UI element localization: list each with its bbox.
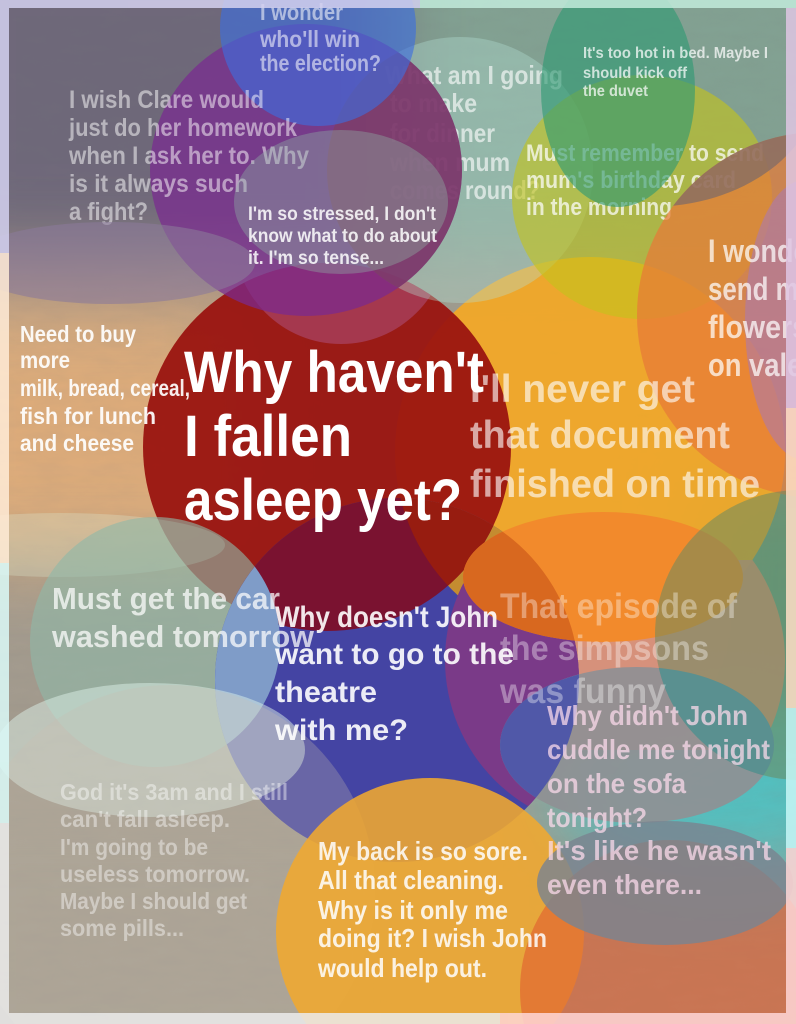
thought: sore back <box>317 836 547 983</box>
circle: pale teal upper middle <box>327 37 593 303</box>
thought: that document <box>470 368 760 506</box>
thought: car wash: washed tomorrow <box>51 619 315 654</box>
circle: purple upper left <box>150 24 462 316</box>
lens: purple overlap of blue and taupe <box>445 583 579 806</box>
lens: maroon overlap of purple and pale teal <box>327 52 462 288</box>
circle: orange red bottom right <box>520 840 796 1024</box>
thought: too hot in bed: the duvet <box>583 83 649 100</box>
segment: dusky top of orange right circle <box>673 135 786 206</box>
thought: what am I going to make <box>385 60 563 205</box>
lens: maroon overlap of blue and red <box>232 498 494 631</box>
thought: theatre with John: Why doesn't John <box>275 601 498 634</box>
circle: greige overlay lower left <box>0 685 375 1024</box>
circle: grey blue lower right <box>537 821 793 945</box>
thought: John didn't cuddle: on the sofa <box>547 768 686 799</box>
thought: Clare's homework: a fight? <box>69 198 148 226</box>
thought: theatre with John: want to go to the <box>274 638 514 671</box>
circle: blue lower centre <box>215 498 579 862</box>
thought: what am I going to make: for dinner <box>390 118 495 148</box>
thought: John didn't cuddle: tonight? <box>547 802 647 833</box>
thought: so stressed: know what to do about <box>248 226 438 247</box>
thought: mum's birthday card: mum's birthday card <box>526 167 736 194</box>
thought: John didn't cuddle: cuddle me tonight <box>547 734 770 765</box>
thought: 3am can't sleep <box>60 779 288 941</box>
circle: blue top <box>220 0 416 126</box>
circle: deep red central <box>143 263 511 631</box>
thought: Clare's homework: I wish Clare would <box>69 86 264 114</box>
thought: what am I going to make: when mum <box>389 147 510 177</box>
thought: what am I going to make: to make <box>390 88 477 118</box>
title: why haven't I fallen asleep yet: asleep yet? <box>184 468 462 533</box>
lens: blue overlap of grey ellipse and blue circle <box>500 674 579 798</box>
thought: too hot in bed: It's too hot in bed. Maybe I <box>583 45 768 62</box>
thought: John didn't cuddle: even there... <box>547 869 702 900</box>
circle: orange lower ellipse <box>463 512 743 642</box>
lens: brown overlap of blue and large orange <box>404 498 576 646</box>
lens: deep teal overlap of grey ellipse and teal circle <box>658 668 774 775</box>
circle: large orange centre right <box>395 257 785 647</box>
circle: dusky lavender left <box>0 222 255 304</box>
thought: simpsons episode: That episode of <box>500 587 737 626</box>
thought: that document: that document <box>470 414 730 457</box>
thought: theatre with John <box>274 601 514 747</box>
thought: sore back: doing it? I wish John <box>318 923 547 953</box>
thought: that document: finished on time <box>470 463 760 506</box>
circle: grey blue mid lower right <box>500 667 774 823</box>
thought: sore back: All that cleaning. <box>318 865 504 895</box>
thought: John didn't cuddle: Why didn't John <box>547 700 748 731</box>
lens: dark orange overlap of blue and orange ellipse <box>463 532 574 641</box>
thought: theatre with John: with me? <box>274 714 408 747</box>
thought: that document: I'll never get <box>470 368 695 411</box>
thought: shopping list: Need to buy <box>20 321 136 347</box>
title: why haven't I fallen asleep yet <box>184 340 484 533</box>
thought: John didn't cuddle: It's like he wasn't <box>547 835 771 866</box>
thought: what am I going to make: comes round? <box>390 175 540 205</box>
thought: Clare's homework: is it always such <box>69 170 248 198</box>
thought: Clare's homework <box>68 86 309 226</box>
thought: too hot in bed: should kick off <box>583 65 688 82</box>
title: why haven't I fallen asleep yet: I fallen <box>184 404 352 469</box>
thought: 3am can't sleep: some pills... <box>60 915 184 941</box>
thought: 3am can't sleep: God it's 3am and I still <box>60 779 288 805</box>
thought: 3am can't sleep: I'm going to be <box>60 834 208 860</box>
thought: 3am can't sleep: Maybe I should get <box>60 888 247 914</box>
thought: shopping list: and cheese <box>20 430 134 456</box>
circle: amber bottom <box>276 778 584 1024</box>
thought: car wash: Must get the car <box>52 581 280 616</box>
thought: 3am can't sleep: can't fall asleep. <box>60 806 230 832</box>
thought: who will win the election: who'll win <box>259 26 360 52</box>
lens: pale pink overlap of red and upper circles <box>244 264 431 344</box>
circle: pale sage left <box>30 517 280 767</box>
lens: dark red overlap of red, orange and blue <box>400 498 494 586</box>
circle: grey teal behind stress thought <box>234 130 448 274</box>
thought: car wash <box>51 581 315 654</box>
thought: too hot in bed <box>583 45 768 100</box>
thought: so stressed: it. I'm so tense... <box>248 248 384 269</box>
thought: Clare's homework: just do her homework <box>68 114 297 142</box>
circle: mauve far right <box>745 180 796 460</box>
circle: salmon taupe lower right <box>574 560 785 750</box>
thought: sore back: My back is so sore. <box>318 836 528 866</box>
thought: sore back: would help out. <box>317 953 487 983</box>
circle: pale mint lower left <box>0 683 305 817</box>
thought: shopping list: milk, bread, cereal, <box>20 375 190 401</box>
thought: Clare's homework: when I ask her to. Why <box>68 142 309 170</box>
thought: who will win the election: the election? <box>260 50 381 76</box>
thought: shopping list: more <box>20 347 70 373</box>
circle: yellow green upper right <box>512 75 772 319</box>
thought: flowers on valentines <box>708 233 796 383</box>
thought: theatre with John: theatre <box>275 676 377 709</box>
thought: shopping list <box>20 321 190 456</box>
circle: green top right <box>541 0 695 207</box>
lens: light blue overlap of blue and sage <box>215 566 280 744</box>
thought: who will win the election <box>259 0 381 76</box>
thought: what am I going to make: What am I going <box>385 60 563 90</box>
thought: so stressed <box>248 204 438 269</box>
circle: pale peach left <box>0 513 225 577</box>
thought: shopping list: fish for lunch <box>20 403 156 429</box>
thought: simpsons episode <box>499 587 737 711</box>
thought: simpsons episode: was funny <box>499 672 667 711</box>
thought: so stressed: I'm so stressed, I don't <box>248 204 437 225</box>
thought: mum's birthday card: Must remember to send <box>526 140 764 167</box>
circle: teal right <box>655 490 796 780</box>
thought: mum's birthday card <box>526 140 764 221</box>
circle: orange right <box>637 132 796 498</box>
thought: sore back: Why is it only me <box>318 895 508 925</box>
thought: John didn't cuddle <box>547 700 771 900</box>
thought: simpsons episode: the simpsons <box>500 629 709 668</box>
thought: 3am can't sleep: useless tomorrow. <box>60 861 250 887</box>
thought: mum's birthday card: in the morning <box>526 194 672 221</box>
title: why haven't I fallen asleep yet: Why haven't <box>184 340 484 405</box>
